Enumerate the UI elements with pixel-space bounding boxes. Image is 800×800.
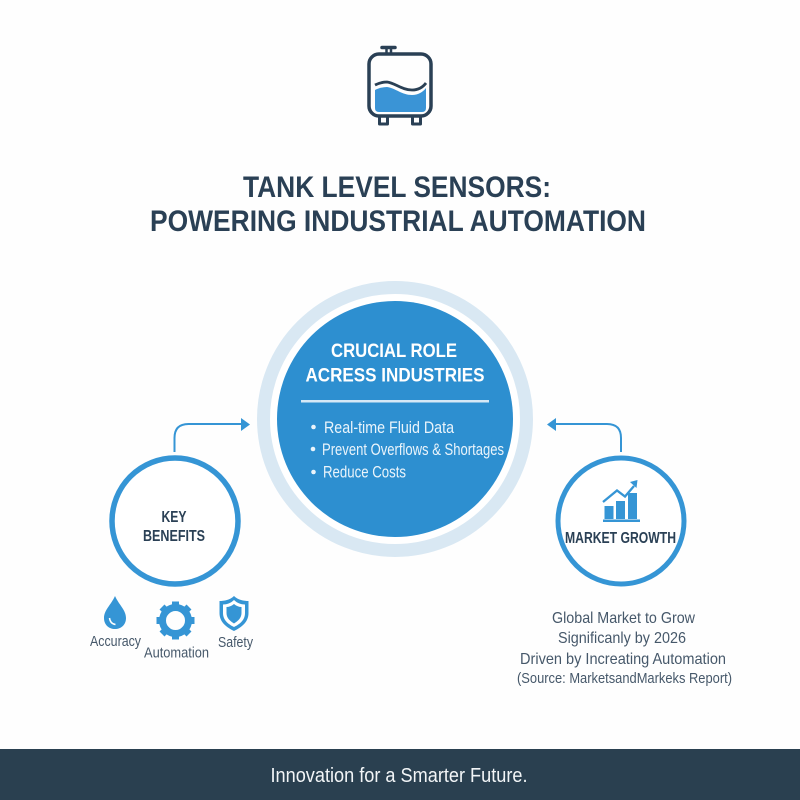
panel: key benefits bbox=[112, 458, 238, 584]
heading: key benefits: KEY bbox=[162, 509, 187, 526]
market growth description: Significanly by 2026 bbox=[558, 630, 686, 647]
heading: crucial role: CRUCIAL ROLE bbox=[331, 341, 457, 362]
title: POWERING INDUSTRIAL AUTOMATION bbox=[150, 205, 646, 238]
crucial role bullets: Prevent Overflows & Shortages bbox=[322, 441, 504, 459]
market growth description: Global Market to Grow bbox=[552, 610, 695, 627]
panel: market growth bbox=[558, 458, 684, 584]
heading: crucial role: ACRESS INDUSTRIES bbox=[306, 366, 484, 386]
heading: key benefits: BENEFITS bbox=[143, 528, 205, 545]
icon: tank bbox=[369, 48, 431, 124]
heading: market growth: MARKET GROWTH bbox=[565, 530, 676, 547]
market growth description: (Source: MarketsandMarkeks Report) bbox=[517, 670, 732, 687]
arrow: benefits to centre bbox=[174, 418, 250, 452]
title bbox=[150, 171, 646, 238]
market growth description bbox=[517, 610, 732, 687]
crucial role bullets bbox=[311, 419, 504, 482]
footer banner bbox=[0, 749, 800, 800]
heading: crucial role bbox=[306, 341, 484, 386]
icon: water drop bbox=[104, 596, 126, 629]
footer banner: Innovation for a Smarter Future. bbox=[270, 765, 528, 787]
label: accuracy: Accuracy bbox=[90, 633, 141, 650]
icon: growth chart bbox=[603, 480, 640, 522]
crucial role bullets: Real-time Fluid Data bbox=[324, 419, 455, 437]
heading: key benefits bbox=[143, 509, 205, 545]
crucial role bullets: Reduce Costs bbox=[323, 464, 406, 482]
icon: shield bbox=[220, 596, 248, 631]
arrow: growth to centre bbox=[547, 418, 621, 452]
market growth description: Driven by Increating Automation bbox=[520, 651, 726, 668]
label: automation: Automation bbox=[144, 644, 209, 662]
icon: gear bbox=[156, 602, 194, 640]
label: safety: Safety bbox=[218, 634, 253, 651]
title: TANK LEVEL SENSORS: bbox=[243, 171, 551, 204]
panel: crucial role bbox=[264, 288, 526, 550]
